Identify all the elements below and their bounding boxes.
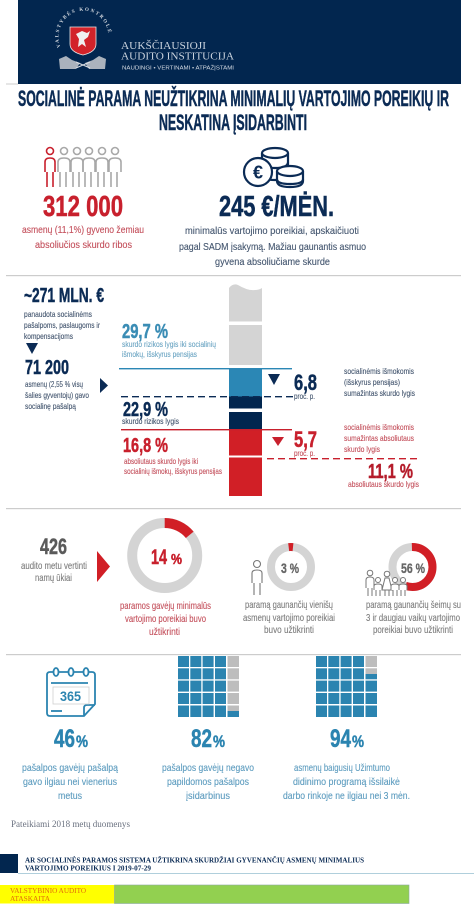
text: recipients' needs met: vartojimo poreikiai buvo: [125, 613, 206, 625]
text: employment retention: asmenų baigusių Užimtumo: [294, 762, 390, 774]
text: single persons' needs met: [243, 599, 335, 636]
text: recipients description: asmenų (2,55 % visų: [25, 379, 83, 389]
waffle chart: 82 %: [178, 656, 239, 717]
label: 22,9 %: skurdo rizikos lygis: [122, 416, 179, 426]
stacked bar chart: [229, 284, 262, 496]
icon: six people, one highlighted: [45, 148, 121, 187]
text: minimum consumption needs: minimalūs vartojimo poreikiai, apskaičiuoti: [185, 225, 359, 237]
text: minimum consumption needs: pagal SADM įsakymą. Mažiau gaunantis asmuo: [179, 241, 366, 253]
number: 312 000: 312 000: [43, 191, 123, 223]
label: 29,7 %: išmokų, išskyrus pensijas: [122, 349, 197, 359]
text: recipients description: socialinę pašalpą: [25, 401, 76, 411]
icon: calendar 365: 365: [60, 688, 81, 704]
icon: calendar 365: [47, 668, 95, 716]
text: recipients description: [25, 379, 89, 411]
icon: single person: [252, 560, 262, 595]
label: 29,7 %: skurdo rizikos lygis iki socialinių: [122, 339, 216, 349]
callout: 6,8 percentage points: 6,8: [294, 370, 317, 395]
panel: households assessed: [21, 523, 461, 638]
text: people below poverty line: [22, 224, 144, 251]
label: 11,1 %: 11,1 %: [368, 461, 413, 483]
number: 94 %: 94: [330, 725, 351, 753]
text: benefits reduced absolute poverty: sumažintas absoliutaus: [344, 433, 414, 443]
text: benefits reduced poverty risk: sumažintas skurdo lygis: [344, 388, 415, 398]
icon: euro coins: [244, 148, 303, 187]
text: benefits reduced poverty risk: (išskyrus pensijas): [344, 377, 400, 387]
number: 46 %: 46: [54, 725, 75, 753]
donut chart: 14 %: 14: [151, 546, 167, 569]
donut chart: 3 %: [269, 545, 313, 589]
text: employment retention: didinimo programą išsilaikė: [293, 776, 400, 788]
text: long-term benefit recipients: gavo ilgiau nei vienerius: [23, 776, 117, 788]
label: 29,7 %: 29,7 %: [122, 321, 168, 343]
text: employment retention: darbo rinkoje ne ilgiau nei 3 mėn.: [283, 790, 410, 802]
text: spending description: pašalpoms, paslaugoms ir: [24, 320, 100, 330]
text: large families' needs met: [366, 599, 461, 636]
text: data year note: Pateikiami 2018 metų duomenys: [11, 819, 130, 829]
callout: 6,8 percentage points: proc. p.: [294, 391, 315, 401]
panel: employment statistics: [22, 656, 410, 802]
donut chart: 3 %: 3 %: [281, 560, 299, 576]
text: no additional benefit: papildomos pašalpos: [167, 776, 249, 788]
footer: audit report bar: [0, 885, 409, 904]
text: single persons' needs met: asmenų vartojimo poreikiai: [243, 612, 335, 624]
text: benefits reduced absolute poverty: [344, 422, 414, 454]
text: benefits reduced absolute poverty: skurdo lygis: [344, 444, 380, 454]
text: recipients' needs met: [120, 600, 211, 638]
footer: audit report bar: ATASKAITA: [10, 894, 51, 903]
logo: state audit office emblem: [55, 7, 112, 69]
text: recipients' needs met: paramos gavėjų minimalūs: [120, 600, 211, 612]
text: households description: namų ūkiai: [35, 572, 72, 584]
icon: euro coins: €: [253, 162, 263, 182]
callout: 5,7 percentage points: proc. p.: [294, 448, 315, 458]
text: long-term benefit recipients: [22, 762, 118, 802]
arrow: down triangle: [26, 343, 38, 354]
title: [18, 86, 449, 135]
arrow: right triangle: [100, 378, 108, 393]
number: 82 %: 82: [191, 725, 212, 753]
number: 82 %: %: [213, 732, 225, 751]
footer: report title: VARTOJIMO POREIKIUS I 2019-07-29: [25, 864, 151, 872]
donut chart: 56 %: [392, 547, 432, 587]
donut chart: 14 %: %: [171, 551, 182, 568]
label: 16,8 %: [123, 435, 222, 476]
logo: state audit office emblem: VALSTYBĖS KONTROLĖ: [55, 7, 112, 48]
text: spending description: [24, 309, 100, 341]
text: minimum consumption needs: gyvena absoliučiame skurde: [215, 256, 330, 268]
text: minimum consumption needs: [179, 225, 366, 268]
label: 16,8 %: 16,8 %: [123, 435, 168, 457]
panel: poverty headline figures: [22, 148, 366, 268]
text: spending description: kompensacijoms: [24, 331, 73, 341]
text: single persons' needs met: paramą gaunančių vienišų: [245, 599, 333, 611]
text: people below poverty line: absoliučios skurdo ribos: [35, 239, 132, 251]
text: households description: audito metu vertinti: [21, 560, 87, 572]
title: NESKATINA ĮSIDARBINTI: [159, 110, 307, 135]
text: recipients' needs met: užtikrinti: [149, 626, 180, 638]
text: no additional benefit: įsidarbinus: [186, 790, 230, 802]
label: 11,1 %: [348, 461, 419, 489]
panel: spending and recipients: [24, 285, 108, 411]
number: 94 %: %: [352, 732, 364, 751]
institution name: [121, 40, 235, 72]
callout: 5,7 percentage points: 5,7: [294, 427, 317, 452]
donut chart: 56 %: 56 %: [401, 560, 425, 576]
arrow: red right triangle: [97, 551, 110, 582]
text: long-term benefit recipients: metus: [58, 790, 82, 802]
text: benefits reduced absolute poverty: socialinėmis išmokomis: [344, 422, 414, 432]
text: employment retention: [283, 762, 410, 802]
text: single persons' needs met: buvo užtikrinti: [264, 624, 314, 636]
waffle chart: 94 %: [316, 656, 377, 717]
text: no additional benefit: [162, 762, 254, 802]
text: benefits reduced poverty risk: socialinėmis išmokomis: [344, 366, 414, 376]
institution name: AUDITO INSTITUCIJA: [121, 52, 235, 62]
number: 271 million euro: ~271 MLN. €: [24, 285, 104, 307]
text: long-term benefit recipients: pašalpos gavėjų pašalpą: [22, 762, 118, 774]
text: households description: [21, 560, 87, 584]
number: 71 200: 71 200: [25, 357, 69, 379]
number: 426: 426: [40, 534, 67, 559]
text: benefits reduced poverty risk: [344, 366, 415, 398]
callout: 5,7 percentage points: [272, 427, 317, 458]
header banner: [6, 0, 461, 84]
label: 16,8 %: absoliutaus skurdo lygis iki: [124, 456, 198, 466]
panel: poverty rate chart: [119, 284, 419, 496]
text: people below poverty line: asmenų (11,1%) gyveno žemiau: [22, 224, 144, 236]
label: 11,1 %: absoliutaus skurdo lygis: [348, 479, 419, 489]
donut chart: 14 %: [132, 523, 197, 588]
label: 29,7 %: [122, 321, 216, 359]
footer: report title: [0, 854, 474, 874]
footer: audit report bar: VALSTYBINIO AUDITO: [10, 886, 87, 895]
icon: family with children: [366, 570, 407, 596]
callout: 6,8 percentage points: [268, 370, 317, 401]
footer: report title: AR SOCIALINĖS PARAMOS SISTEMA UŽTIKRINA SKURDŽIAI GYVENANČIŲ ASMENŲ MINIMALIUS: [25, 854, 364, 864]
label: 22,9 %: 22,9 %: [123, 399, 168, 421]
label: 16,8 %: socialinių išmokų, išskyrus pensijas: [124, 466, 222, 476]
text: no additional benefit: pašalpos gavėjų negavo: [162, 762, 254, 774]
number: 46 %: %: [76, 732, 88, 751]
number: 245 euro per month: 245 €/MĖN.: [219, 191, 334, 223]
institution name: AUKŠČIAUSIOJI: [121, 40, 206, 52]
institution name: NAUDINGI • VERTINAMI • ATPAŽĮSTAMI: [122, 64, 235, 72]
text: spending description: panaudota socialinėms: [24, 309, 92, 319]
text: recipients description: šalies gyventojų) gavo: [25, 390, 89, 400]
